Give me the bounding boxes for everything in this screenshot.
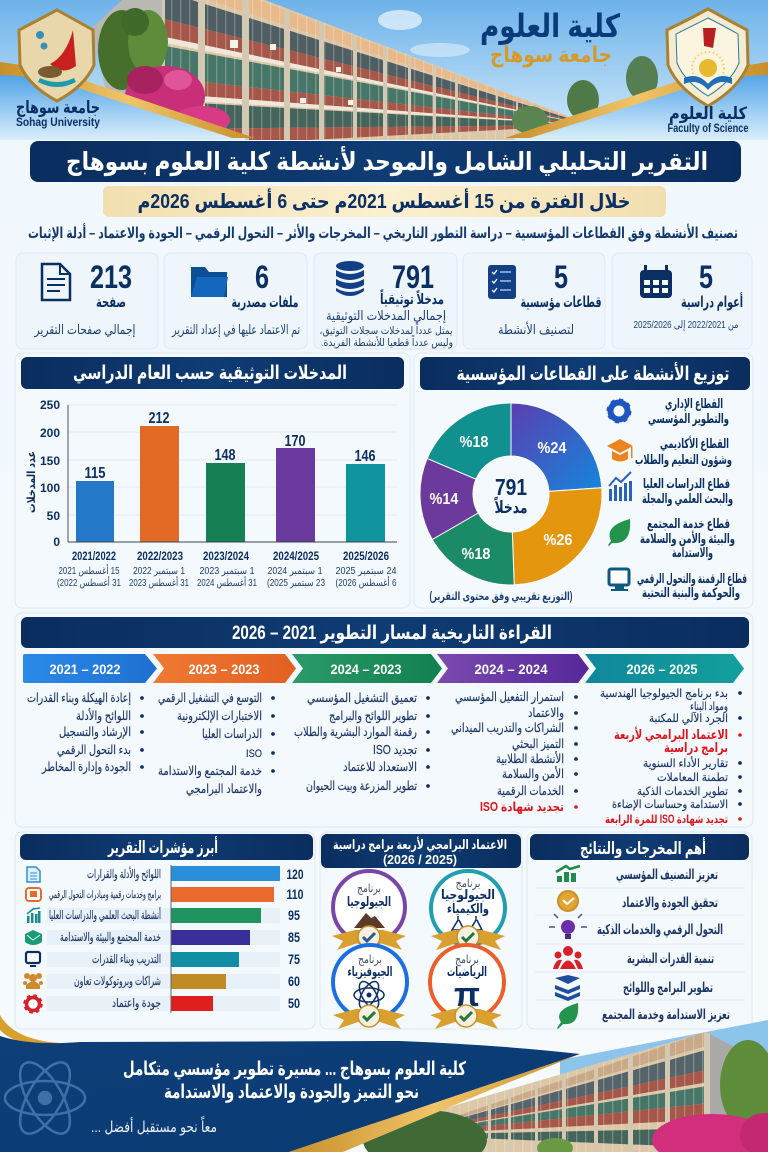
timeline arrows: 2021 – 2022	[50, 661, 121, 677]
heading	[420, 357, 750, 390]
stat card: years	[612, 253, 752, 349]
bar chart: 150	[40, 454, 60, 468]
logo: Faculty of Science	[667, 9, 749, 135]
column: 2021-2022: الإرشاد والتسجيل	[59, 725, 131, 740]
heading	[20, 834, 313, 860]
bar chart: 31 أغسطس 2023	[129, 576, 189, 589]
panel: entries per academic year	[15, 353, 410, 608]
label: Sohag University	[16, 98, 100, 129]
badge: geophysics	[333, 945, 407, 1029]
stat value: 5	[554, 259, 568, 295]
badge: geology and chemistry: برنامج	[456, 878, 480, 891]
heading: أبرز مؤشرات التقرير	[107, 836, 218, 858]
column: 2021-2022	[27, 691, 144, 775]
icon: folder	[191, 267, 228, 297]
badge: mathematics: الرياضيات	[447, 964, 487, 979]
footer banner	[0, 1015, 768, 1152]
column: 2023-2024: رقمنة الموارد البشرية والطلاب	[294, 725, 417, 740]
timeline arrows	[23, 654, 744, 683]
badge: mathematics	[430, 945, 504, 1029]
outputs list: تطوير البرامج واللوائح	[623, 980, 713, 995]
photo: faculty building	[162, 0, 569, 140]
bar chart: 2023/2024	[203, 549, 249, 563]
bar chart: 100	[40, 481, 60, 495]
column: 2022-2023: خدمة المجتمع والاستدامة	[158, 764, 262, 779]
stat note: وليس عدداً قطعيا للأنشطة الفريدة.	[321, 335, 453, 349]
badge: geology: الجيولوجيا	[347, 894, 391, 909]
label: Faculty of Science	[668, 104, 749, 135]
horizontal bar chart: 60	[288, 973, 300, 989]
column: 2021-2022: إعادة الهيكلة وبناء القدرات	[27, 691, 131, 706]
donut chart: مدخلاً	[494, 496, 528, 517]
column: 2024: والاعتماد	[528, 706, 564, 721]
badge: geology	[332, 871, 406, 950]
period bar: خلال الفترة من 15 أغسطس 2021م حتى 6 أغسطس 2026م	[138, 187, 630, 213]
panel: historical timeline	[15, 613, 753, 827]
heading: (2026 / 2025)	[383, 853, 457, 867]
timeline arrows: 2023 – 2023	[188, 661, 260, 677]
bar chart: 0	[53, 535, 60, 549]
bar chart: 31 أغسطس 2024	[197, 576, 257, 589]
stat label: مدخلاً توثيقياً	[380, 289, 444, 308]
column: 2025-2026: بدء برنامج الجيولوجيا الهندسية	[600, 688, 728, 701]
stat label: صفحة	[96, 294, 126, 311]
horizontal bar chart: التدريب وبناء القدرات	[92, 952, 161, 967]
stat note	[320, 308, 453, 349]
bar chart: 2025/2026	[343, 549, 389, 563]
donut chart	[420, 403, 602, 585]
label: Sohag University: Sohag University	[16, 115, 100, 129]
label: Faculty of Science: كلية العلوم	[669, 104, 747, 124]
stat value: 791	[392, 259, 434, 295]
stat note: إجمالي صفحات التقرير	[34, 322, 136, 338]
icon: document	[42, 264, 70, 300]
column: 2022-2023: الاختبارات الإلكترونية	[177, 709, 262, 724]
column: 2025-2026: الاعتماد البرامجي لأربعة	[614, 726, 728, 742]
stat note: من 2022/2021 إلى 2025/2026	[634, 319, 738, 331]
stat note: لتصنيف الأنشطة	[498, 321, 574, 337]
heading	[21, 617, 749, 648]
badge: geophysics: برنامج	[358, 954, 382, 967]
column: 2023-2024: تطوير اللوائح والبرامج	[329, 709, 417, 724]
bar chart: 2024/2025	[273, 549, 319, 563]
horizontal bar chart: 120	[286, 866, 304, 882]
donut chart: %14	[430, 491, 459, 508]
column: 2024: الخدمات الرقمية	[497, 784, 564, 799]
badge: geology and chemistry: والكيمياء	[447, 901, 489, 916]
footer message	[123, 1059, 467, 1103]
column: 2022-2023: ISO	[246, 748, 262, 760]
donut chart: %24	[538, 440, 567, 457]
bar chart: 146	[354, 448, 376, 465]
stat label: قطاعات مؤسسية	[520, 294, 602, 311]
column: 2023-2024: الاستعداد للاعتماد	[343, 760, 417, 774]
horizontal bar chart: 85	[288, 929, 300, 945]
photo: trees and flowers	[363, 1040, 768, 1152]
donut chart: %18	[462, 546, 491, 563]
bar chart: 115	[84, 465, 106, 482]
chart caption: (التوزيع تقريبي وفق محتوى التقرير)	[430, 591, 573, 604]
footer message: كلية العلوم بسوهاج ... مسيرة تطوير مؤسسي متكامل	[123, 1059, 467, 1080]
icon: atom	[5, 1055, 85, 1141]
badge: mathematics: π	[454, 976, 480, 1014]
bar chart: 50	[47, 509, 60, 523]
stat note: تم الاعتماد عليها في إعداد التقرير	[171, 322, 300, 338]
bar chart: 250	[40, 398, 60, 412]
photo: trees and flowers	[98, 8, 658, 134]
donut chart: 791	[495, 474, 527, 500]
column: 2024: تجديد شهادة ISO	[480, 800, 564, 814]
bar chart: 2021/2022	[72, 549, 116, 563]
stat card: source files	[164, 253, 307, 349]
bar chart: 23 سبتمبر 2025)	[267, 578, 325, 589]
stat value: 5	[699, 259, 713, 295]
icon: graduation cap	[607, 439, 633, 462]
legend: والاستدامة	[672, 545, 713, 560]
heading	[21, 357, 404, 389]
heading	[530, 834, 749, 860]
bar chart: 1 سبتمبر 2023	[200, 566, 255, 577]
horizontal bar chart: جودة واعتماد	[112, 996, 161, 1011]
column: 2022-2023: التوسع في التشغيل الرقمي	[158, 691, 262, 706]
icon: calendar	[640, 265, 672, 298]
icon: gear	[608, 400, 630, 422]
stat card: entries	[314, 253, 457, 349]
legend: القطاع الإداري	[665, 396, 723, 411]
title bar	[30, 141, 741, 182]
bar chart: 2022/2023	[137, 549, 183, 563]
photo: faculty building	[440, 1032, 734, 1152]
bar chart: عدد المدخلات	[26, 451, 38, 513]
indicator rows backgrounds	[47, 908, 280, 1011]
heading: الاعتماد البرامجي لأربعة برامج دراسية	[333, 836, 507, 852]
heading: المدخلات التوثيقية حسب العام الدراسي	[73, 363, 347, 384]
panel: outputs and results	[527, 832, 752, 1029]
footer tagline: معاً نحو مستقبل أفضل ...	[91, 1116, 217, 1136]
column: 2025-2026: تطوير الخدمات الذكية	[637, 786, 728, 799]
horizontal bar chart: 110	[286, 886, 304, 902]
bar chart: 148	[214, 447, 236, 464]
stat note: يمثل عدداً لمدخلات سجلات التوثيق،	[320, 323, 453, 337]
column: 2025-2026: الجرد الآلي للمكتبة	[649, 711, 728, 726]
column: 2023-2024: تجديد ISO	[373, 743, 417, 757]
heading: أهم المخرجات والنتائج	[580, 837, 706, 859]
column: 2025-2026: تقارير الأداء السنوية	[643, 756, 728, 771]
column: 2023-2024: تطوير المزرعة وبيت الحيوان	[306, 779, 417, 794]
bar chart: 170	[284, 433, 306, 450]
column: 2023-2024: تعميق التشغيل المؤسسي	[307, 691, 417, 706]
bar chart: 6 أغسطس 2026)	[336, 576, 397, 589]
column: 2021-2022: بدء التحول الرقمي	[57, 743, 131, 758]
icon: leaf	[608, 519, 630, 546]
horizontal bar chart: 75	[288, 951, 300, 967]
bar chart: 212	[148, 410, 170, 427]
column: 2025-2026: تجديد شهادة ISO للمرة الرابعة	[605, 814, 728, 826]
header banner	[0, 0, 768, 148]
label: Sohag University: جامعة سوهاج	[16, 98, 100, 118]
column: 2025-2026: الاستدامة وحساسات الإضاءة	[612, 799, 728, 812]
bar chart: 1 سبتمبر 2024	[268, 566, 323, 577]
column: 2021-2022: اللوائح والأدلة	[76, 708, 131, 724]
heading	[321, 834, 521, 868]
stat card: sectors	[463, 253, 605, 349]
horizontal bar chart: 50	[288, 995, 300, 1011]
outputs list	[597, 867, 730, 1022]
badge: geology and chemistry: الجيولوجيا	[441, 887, 495, 902]
bar chart: 31 أغسطس 2022)	[57, 576, 121, 589]
horizontal bar chart: خدمة المجتمع والبيئة والاستدامة	[60, 930, 161, 945]
icon: monitor	[609, 569, 629, 591]
logo: Sohag University	[16, 10, 100, 129]
bar chart: 24 سبتمبر 2025	[336, 566, 397, 577]
stat value: 213	[90, 259, 132, 295]
indicator icons	[23, 867, 43, 1012]
heading: faculty name: كلية العلوم	[480, 8, 620, 45]
badge: geology and chemistry	[431, 871, 505, 950]
period bar	[103, 186, 666, 217]
heading: university name: جامعة سوهاج	[490, 42, 612, 68]
column: 2022-2023: الدراسات العليا	[202, 727, 262, 742]
panel: distribution by sector	[414, 353, 753, 608]
column: 2021-2022: الجودة وإدارة المخاطر	[41, 760, 131, 775]
column: 2024: الأنشطة الطلابية	[496, 751, 564, 766]
column: 2025-2026: تطمنة المعاملات	[657, 772, 728, 784]
output icons	[549, 866, 587, 1029]
donut chart: %18	[460, 434, 489, 451]
heading: القراءة التاريخية لمسار التطوير 2021 – 2026	[232, 623, 552, 644]
badge: mathematics: برنامج	[455, 954, 479, 967]
icon: growth chart	[609, 472, 632, 501]
legend	[607, 396, 747, 600]
horizontal bar chart: برامج وخدمات رقمية ومبادرات التحول الرقمي	[49, 889, 161, 901]
donut chart: %26	[544, 532, 573, 549]
timeline arrows: 2024 – 2024	[474, 661, 548, 677]
bar chart: 1 سبتمبر 2022	[133, 566, 185, 577]
footer message: نحو التميز والجودة والاعتماد والاستدامة	[164, 1082, 419, 1103]
column: 2024: الشراكات والتدريب الميداني	[451, 721, 564, 736]
stat label: ملفات مصدرية	[232, 294, 298, 311]
column: 2024: التميز البحثي	[512, 737, 564, 752]
column: 2024: استمرار التفعيل المؤسسي	[455, 690, 564, 705]
column: 2024: الأمن والسلامة	[502, 766, 564, 782]
column: 2024	[451, 690, 578, 814]
column: 2022-2023	[158, 691, 275, 797]
timeline arrows: 2024 – 2023	[330, 661, 402, 677]
icon: checklist	[488, 265, 516, 299]
outputs list: تنمية القدرات البشرية	[627, 951, 714, 966]
column: 2023-2024	[294, 691, 430, 794]
horizontal bar chart: 95	[288, 907, 300, 923]
bar chart: 200	[40, 426, 60, 440]
swoosh wedges	[0, 72, 245, 140]
horizontal bar chart: شراكات وبروتوكولات تعاون	[74, 974, 161, 989]
badge: geology: برنامج	[357, 883, 381, 896]
badge: geophysics: الجيوفيزياء	[348, 964, 392, 979]
legend: القطاع الأكاديمي	[660, 435, 729, 451]
stat card: pages	[16, 253, 158, 349]
panel: key indicators	[15, 832, 315, 1029]
horizontal bar chart	[49, 865, 304, 1013]
stat value: 6	[255, 259, 269, 295]
bar chart: 15 أغسطس 2021	[58, 564, 120, 577]
icon: database	[336, 261, 364, 296]
timeline arrows: 2026 – 2025	[626, 661, 698, 677]
column: 2025-2026	[600, 688, 742, 826]
column: 2025-2026: ومواد البناء	[690, 701, 728, 714]
stat note: إجمالي المدخلات التوثيقية	[326, 308, 446, 324]
bar chart	[26, 398, 397, 589]
column: 2022-2023: والاعتماد البرامجي	[186, 782, 262, 797]
horizontal bar chart: أنشطة البحث العلمي والدراسات العليا	[49, 907, 161, 923]
column: 2025-2026: برامج دراسية	[664, 740, 728, 755]
horizontal bar chart: اللوائح والأدلة والقرارات	[87, 866, 161, 882]
panel: programme accreditation	[320, 832, 522, 1029]
